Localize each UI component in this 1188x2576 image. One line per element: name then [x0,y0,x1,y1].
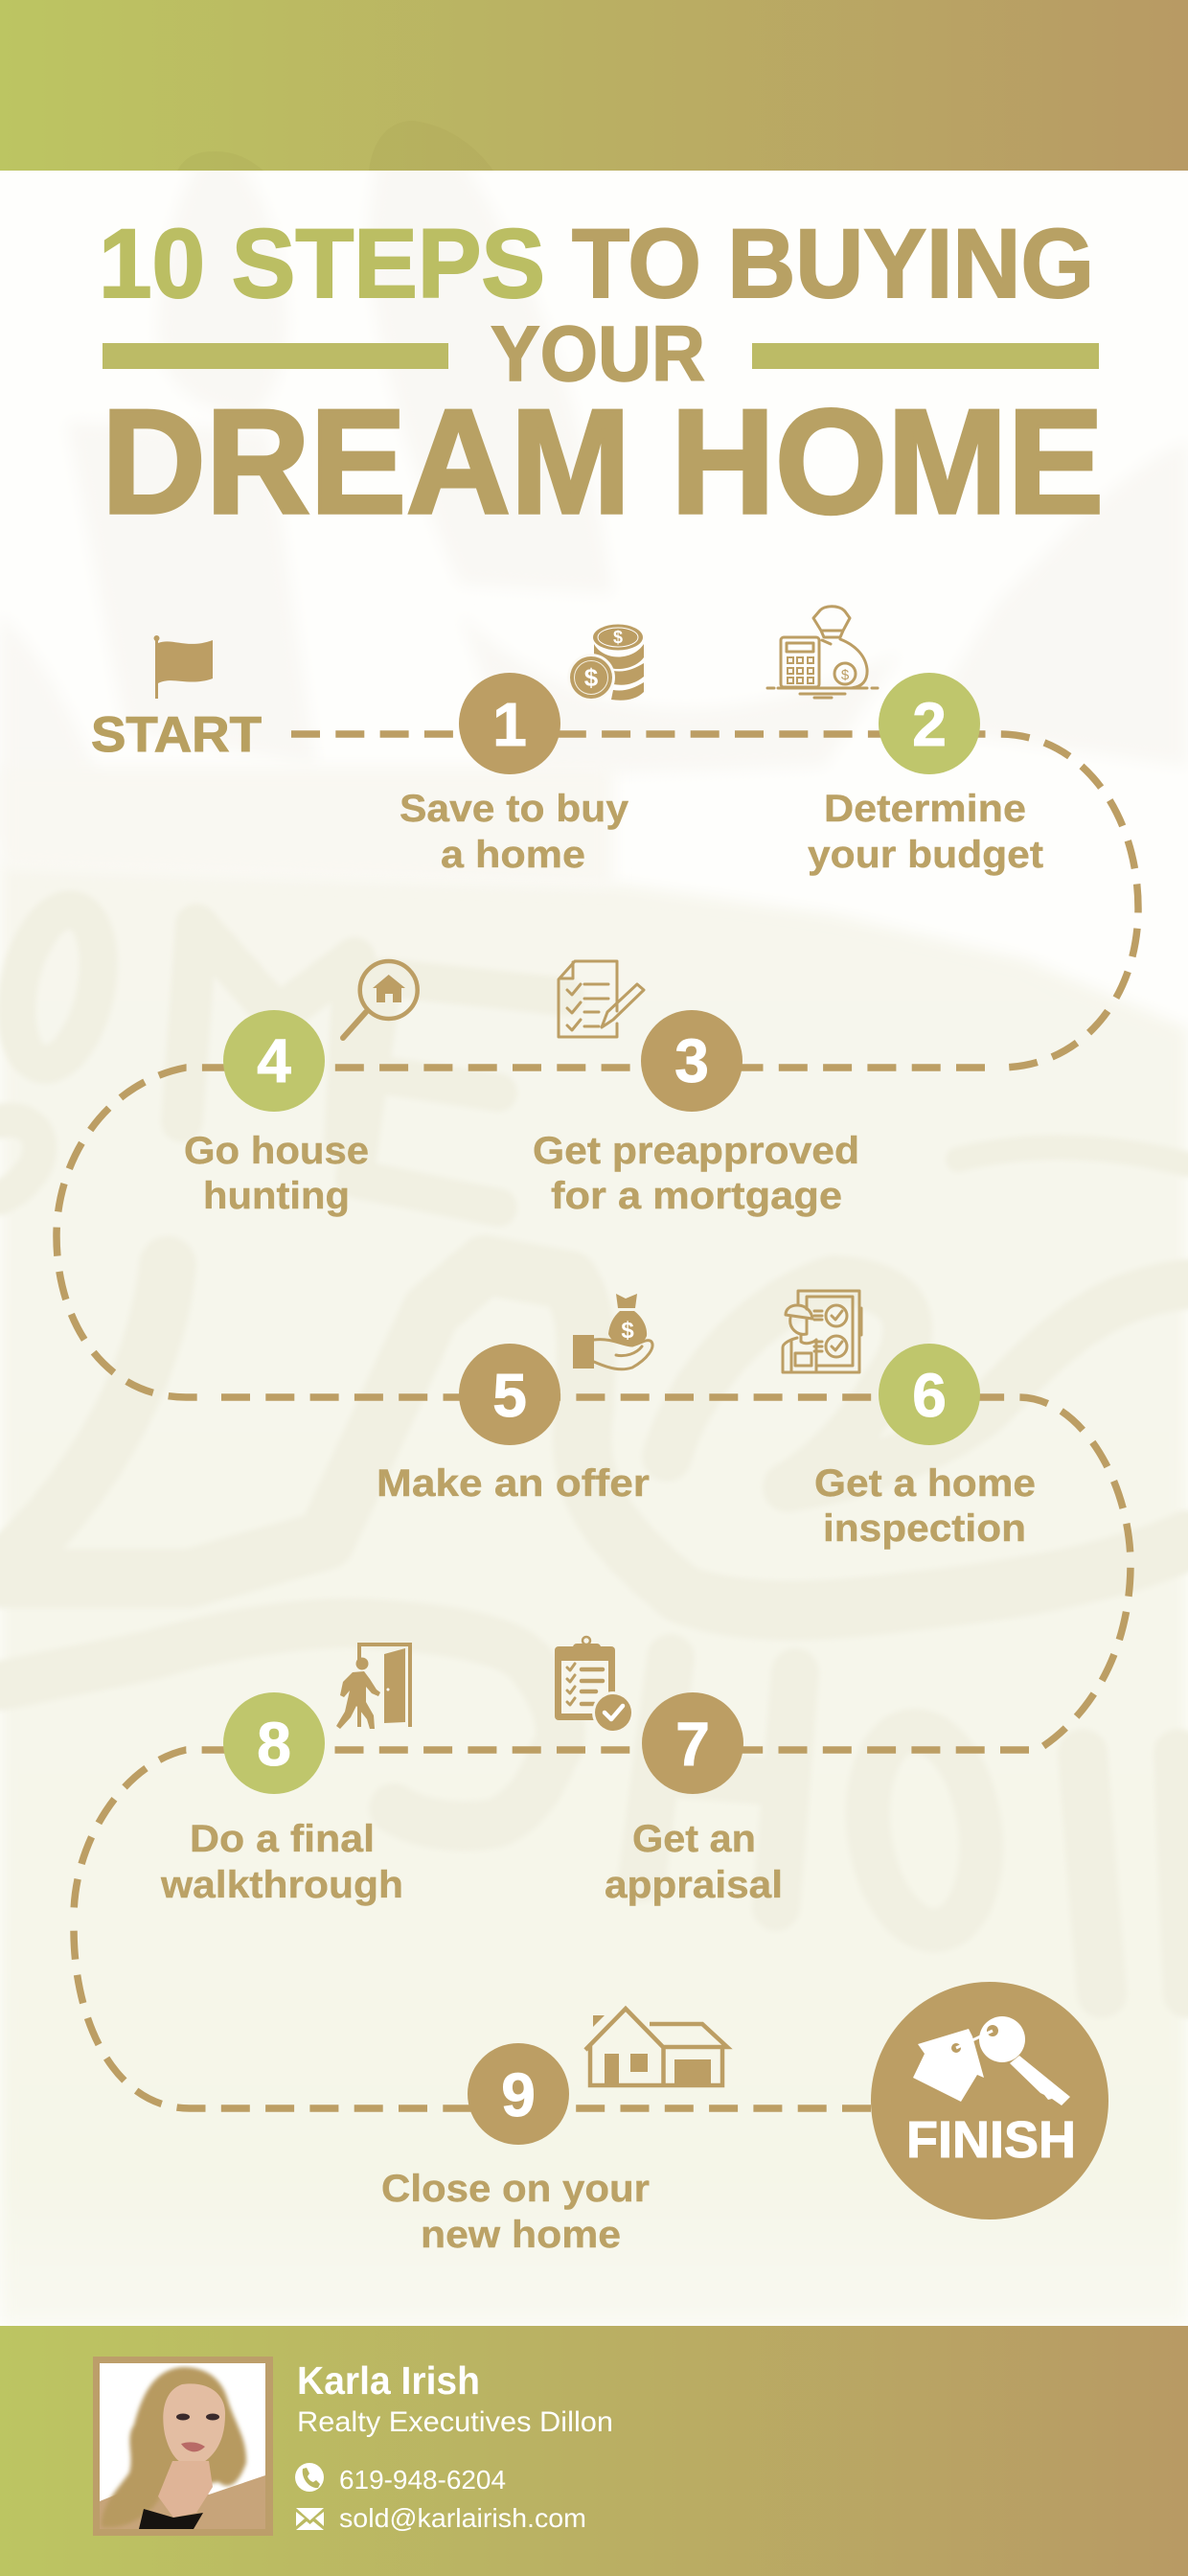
label 7: Get an [632,1818,756,1860]
icon: magnifier with house [343,961,418,1038]
label 2: your budget [808,834,1043,876]
icon: phone [295,2463,324,2492]
number circle 8: 8 [257,1710,291,1779]
label 9: new home [421,2214,621,2256]
label 8: walkthrough [160,1864,403,1906]
footer band [0,2326,1188,2576]
start label: START [91,707,262,763]
step 5 [377,1294,652,1505]
step 1 [400,625,644,876]
step 3 [533,961,859,1217]
finish badge [871,1982,1108,2220]
number circle 6: 6 [912,1361,947,1430]
label 1: Save to buy [400,788,629,830]
label 6: inspection [823,1507,1026,1550]
label 7 [605,1818,783,1906]
header band [0,0,1188,171]
dashed route line [57,734,1138,2108]
icon: calculator and money bag: $ [841,667,850,683]
label 6 [814,1462,1036,1550]
number circle 7 [642,1692,743,1794]
number circle 5: 5 [492,1361,527,1430]
number circle 3 [641,1010,742,1112]
icon: house with garage [585,2009,727,2085]
icon: coins: $ [613,628,623,647]
step 8 [160,1643,412,1906]
label 1 [400,788,629,876]
label 9 [381,2168,650,2256]
step 6 [783,1291,1036,1550]
step 4 [184,961,418,1217]
icon: coins [567,625,644,702]
number circle 1: 1 [492,690,527,759]
label 1: a home [441,834,585,876]
agent name: Karla Irish [297,2358,480,2403]
start marker [91,635,262,763]
number circle 9: 9 [501,2060,536,2129]
icon: email envelope [296,2508,324,2530]
number circle 1 [459,673,560,774]
finish label: FINISH [906,2111,1076,2169]
icon: flag [153,635,213,699]
icon: house tag and key [913,2016,1070,2105]
number circle 4: 4 [257,1026,291,1095]
phone number: 619-948-6204 [339,2465,506,2495]
label 8: Do a final [190,1818,375,1860]
label 8 [160,1818,403,1906]
label 2: Determine [824,788,1026,830]
title line 1 green: 10 STEPS [99,209,545,318]
label 9: Close on your [381,2168,650,2210]
icon: hand holding money bag: $ [621,1318,634,1344]
label 3: for a mortgage [551,1175,842,1217]
number circle 4 [223,1010,325,1112]
number circle 5 [459,1344,560,1445]
title [99,209,1104,544]
left rule [103,343,448,369]
icon: coins: $ [584,663,599,692]
number circle 9 [468,2043,569,2145]
agency: Realty Executives Dillon [297,2406,613,2438]
icon: home inspector with checklist [783,1291,861,1372]
icon: clipboard with check [555,1637,634,1734]
icon: document and pen [559,961,644,1037]
title line 2: YOUR [491,310,705,398]
label 4 [184,1130,369,1217]
label 4: hunting [203,1175,350,1217]
step 2 [767,607,1043,876]
title line 1 tan: TO BUYING [572,209,1094,318]
label 3 [533,1130,859,1217]
number circle 6 [879,1344,980,1445]
label 6: Get a home [814,1462,1036,1505]
number circle 2 [879,673,980,774]
label 3: Get preapproved [533,1130,859,1172]
agent photo [93,2357,273,2536]
step 7 [555,1637,783,1906]
title line 3: DREAM HOME [102,379,1104,544]
label 5: Make an offer [377,1462,650,1505]
email address: sold@karlairish.com [339,2503,586,2533]
number circle 7: 7 [675,1710,710,1779]
label 4: Go house [184,1130,369,1172]
label 7: appraisal [605,1864,783,1906]
step 9 [381,2009,727,2256]
number circle 2: 2 [912,690,947,759]
icon: hand holding money bag [573,1294,652,1369]
icon: person walking through door [336,1643,412,1729]
label 2 [808,788,1043,876]
number circle 8 [223,1692,325,1794]
right rule [752,343,1099,369]
icon: calculator and money bag [767,607,878,698]
number circle 3: 3 [674,1026,709,1095]
